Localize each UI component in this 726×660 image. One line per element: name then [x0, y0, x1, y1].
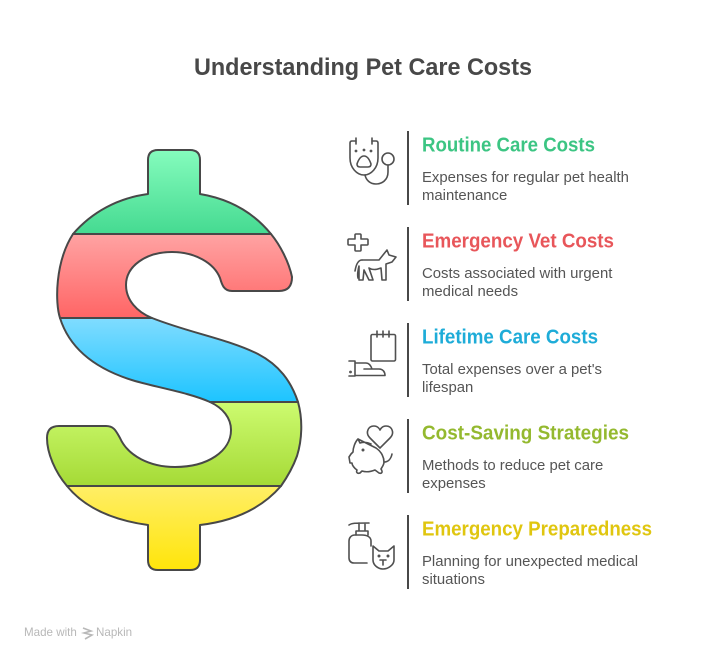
description: Total expenses over a pet's	[422, 362, 602, 378]
heading: Emergency Preparedness	[422, 518, 652, 540]
heading: Cost-Saving Strategies	[422, 422, 629, 444]
footer: made with Napkin: Made with	[24, 626, 77, 639]
title: Understanding Pet Care Costs	[194, 54, 532, 81]
footer: made with Napkin: Napkin	[96, 626, 132, 639]
heading: Routine Care Costs	[422, 134, 595, 156]
item: routine care	[350, 131, 629, 205]
segment: routine care	[73, 150, 271, 234]
divider	[407, 419, 409, 493]
segment: emergency vet	[57, 234, 292, 318]
segment: lifetime care	[60, 318, 298, 402]
footer: made with Napkin	[24, 626, 132, 639]
divider	[407, 323, 409, 397]
segment: cost saving	[47, 402, 301, 486]
item: emergency preparedness	[349, 515, 652, 589]
description: Expenses for regular pet health	[422, 170, 629, 186]
description: Methods to reduce pet care	[422, 458, 603, 474]
heading: Lifetime Care Costs	[422, 326, 598, 348]
description: lifespan	[422, 380, 473, 396]
dollar sign chart	[47, 150, 301, 570]
divider	[407, 227, 409, 301]
divider	[407, 131, 409, 205]
icon: calendar in hand	[349, 331, 396, 376]
divider	[407, 515, 409, 589]
description: Costs associated with urgent	[422, 266, 613, 282]
item: emergency vet	[348, 227, 614, 301]
description: medical needs	[422, 284, 518, 300]
description: Planning for unexpected medical	[422, 554, 638, 570]
item: cost saving	[349, 419, 629, 493]
icon: Napkin logo	[83, 628, 92, 639]
description: situations	[422, 572, 485, 588]
description: expenses	[422, 476, 486, 492]
icon: stethoscope with paw	[350, 138, 394, 184]
segment: emergency preparedness	[67, 486, 281, 570]
heading: Emergency Vet Costs	[422, 230, 614, 252]
item: lifetime care	[349, 323, 602, 397]
icon: bottle and cat	[349, 523, 394, 569]
icon: piggy bank and heart	[349, 426, 393, 473]
description: maintenance	[422, 188, 507, 204]
icon: medical cross and dog	[348, 234, 396, 280]
